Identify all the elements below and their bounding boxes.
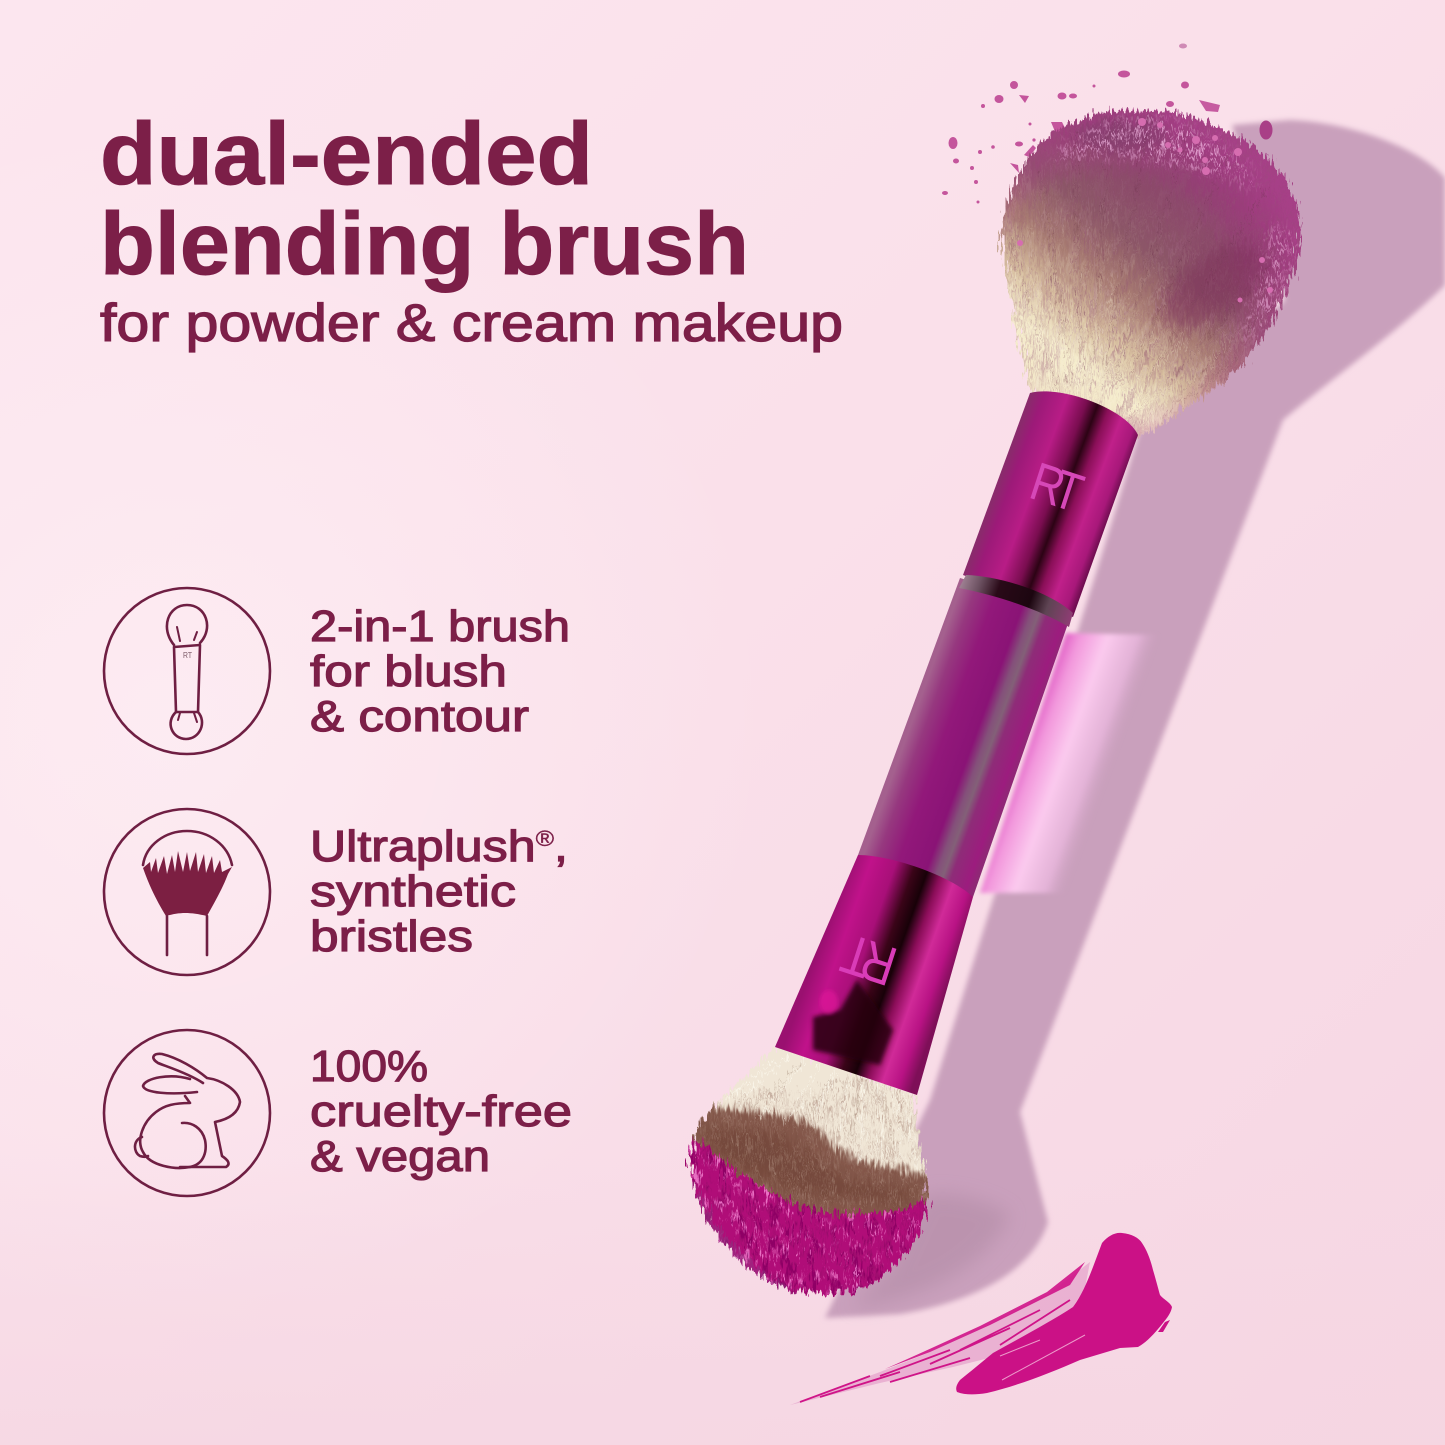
powder on bristles xyxy=(1017,118,1273,302)
bottom ferrule xyxy=(775,855,973,1095)
text: , xyxy=(554,822,568,871)
text: 2-in-1 brush xyxy=(310,602,570,651)
top ferrule xyxy=(963,391,1138,617)
feature: cruelty-free xyxy=(104,1030,572,1196)
cream blush swatch xyxy=(790,1233,1172,1405)
darker contact shadow under small head xyxy=(850,1194,1010,1308)
feature: Ultraplush bristles xyxy=(104,809,568,975)
text: cruelty-free xyxy=(310,1087,572,1136)
text: ® xyxy=(536,826,554,851)
text xyxy=(310,1042,572,1181)
bristle strands xyxy=(1010,115,1290,405)
translucent middle section xyxy=(858,578,1072,897)
title xyxy=(100,104,749,293)
text xyxy=(310,602,570,741)
brown band xyxy=(680,1107,935,1230)
brush cast shadow xyxy=(825,120,1445,1318)
magenta pigment tips xyxy=(685,1136,932,1298)
icon: rabbit xyxy=(104,1030,270,1196)
text: & contour xyxy=(310,692,529,741)
brush handle xyxy=(775,391,1138,1095)
text: bristles xyxy=(310,912,473,961)
feature: 2-in-1 brush xyxy=(104,588,570,754)
title: dual-ended xyxy=(100,104,593,203)
subtitle: for powder & cream makeup xyxy=(100,294,843,353)
brush: large powder end bristles xyxy=(997,106,1303,439)
solid paint xyxy=(956,1233,1172,1394)
dark collar band xyxy=(959,575,1073,627)
RT logo top: RT xyxy=(1023,451,1090,524)
magenta glint xyxy=(820,990,838,1014)
text: synthetic xyxy=(310,867,516,916)
icon: double-ended brush xyxy=(104,588,270,754)
dark patch of pigment xyxy=(1155,238,1270,339)
text: Ultraplush xyxy=(310,822,508,871)
text xyxy=(310,822,568,961)
text: 100% xyxy=(310,1042,428,1091)
icon: bristles xyxy=(104,809,270,975)
text: for blush xyxy=(310,647,507,696)
title: blending brush xyxy=(100,194,749,293)
pink light reflection xyxy=(980,633,1160,893)
dry streak xyxy=(790,1262,1090,1405)
RT logo bottom: RT xyxy=(834,922,904,998)
text: & vegan xyxy=(310,1132,490,1181)
loose powder particles xyxy=(942,44,1272,204)
reflection on bottom ferrule xyxy=(813,980,893,1065)
brush: small cream end bristles xyxy=(685,1046,932,1298)
white hair strands xyxy=(725,1055,918,1170)
icon: double-ended brush: RT xyxy=(183,651,192,660)
